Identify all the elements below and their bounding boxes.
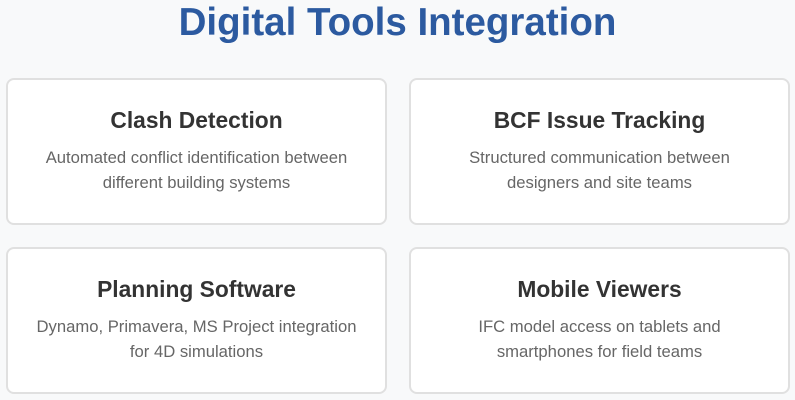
text: planning software description (36, 317, 356, 361)
text: clash detection description (46, 148, 347, 192)
heading: clash detection: Clash Detection (110, 107, 283, 133)
text: mobile viewers description: smartphones for field teams (497, 342, 702, 361)
panel: BCF issue tracking (409, 78, 790, 225)
text: BCF issue tracking description: designers and site teams (507, 173, 692, 192)
text: planning software description: for 4D simulations (130, 342, 263, 361)
text: clash detection description: different building systems (103, 173, 290, 192)
heading: planning software: Planning Software (97, 276, 296, 302)
text: planning software description: Dynamo, Primavera, MS Project integration (36, 317, 356, 336)
heading: BCF issue tracking: BCF Issue Tracking (494, 107, 705, 133)
panel: clash detection (6, 78, 387, 225)
text: BCF issue tracking description (469, 148, 730, 192)
title: Digital Tools Integration (179, 1, 616, 44)
panel: planning software (6, 247, 387, 394)
text: mobile viewers description (478, 317, 721, 361)
text: clash detection description: Automated conflict identification between (46, 148, 347, 167)
heading: mobile viewers: Mobile Viewers (517, 276, 682, 302)
panel: mobile viewers (409, 247, 790, 394)
text: mobile viewers description: IFC model access on tablets and (478, 317, 721, 336)
text: BCF issue tracking description: Structured communication between (469, 148, 730, 167)
